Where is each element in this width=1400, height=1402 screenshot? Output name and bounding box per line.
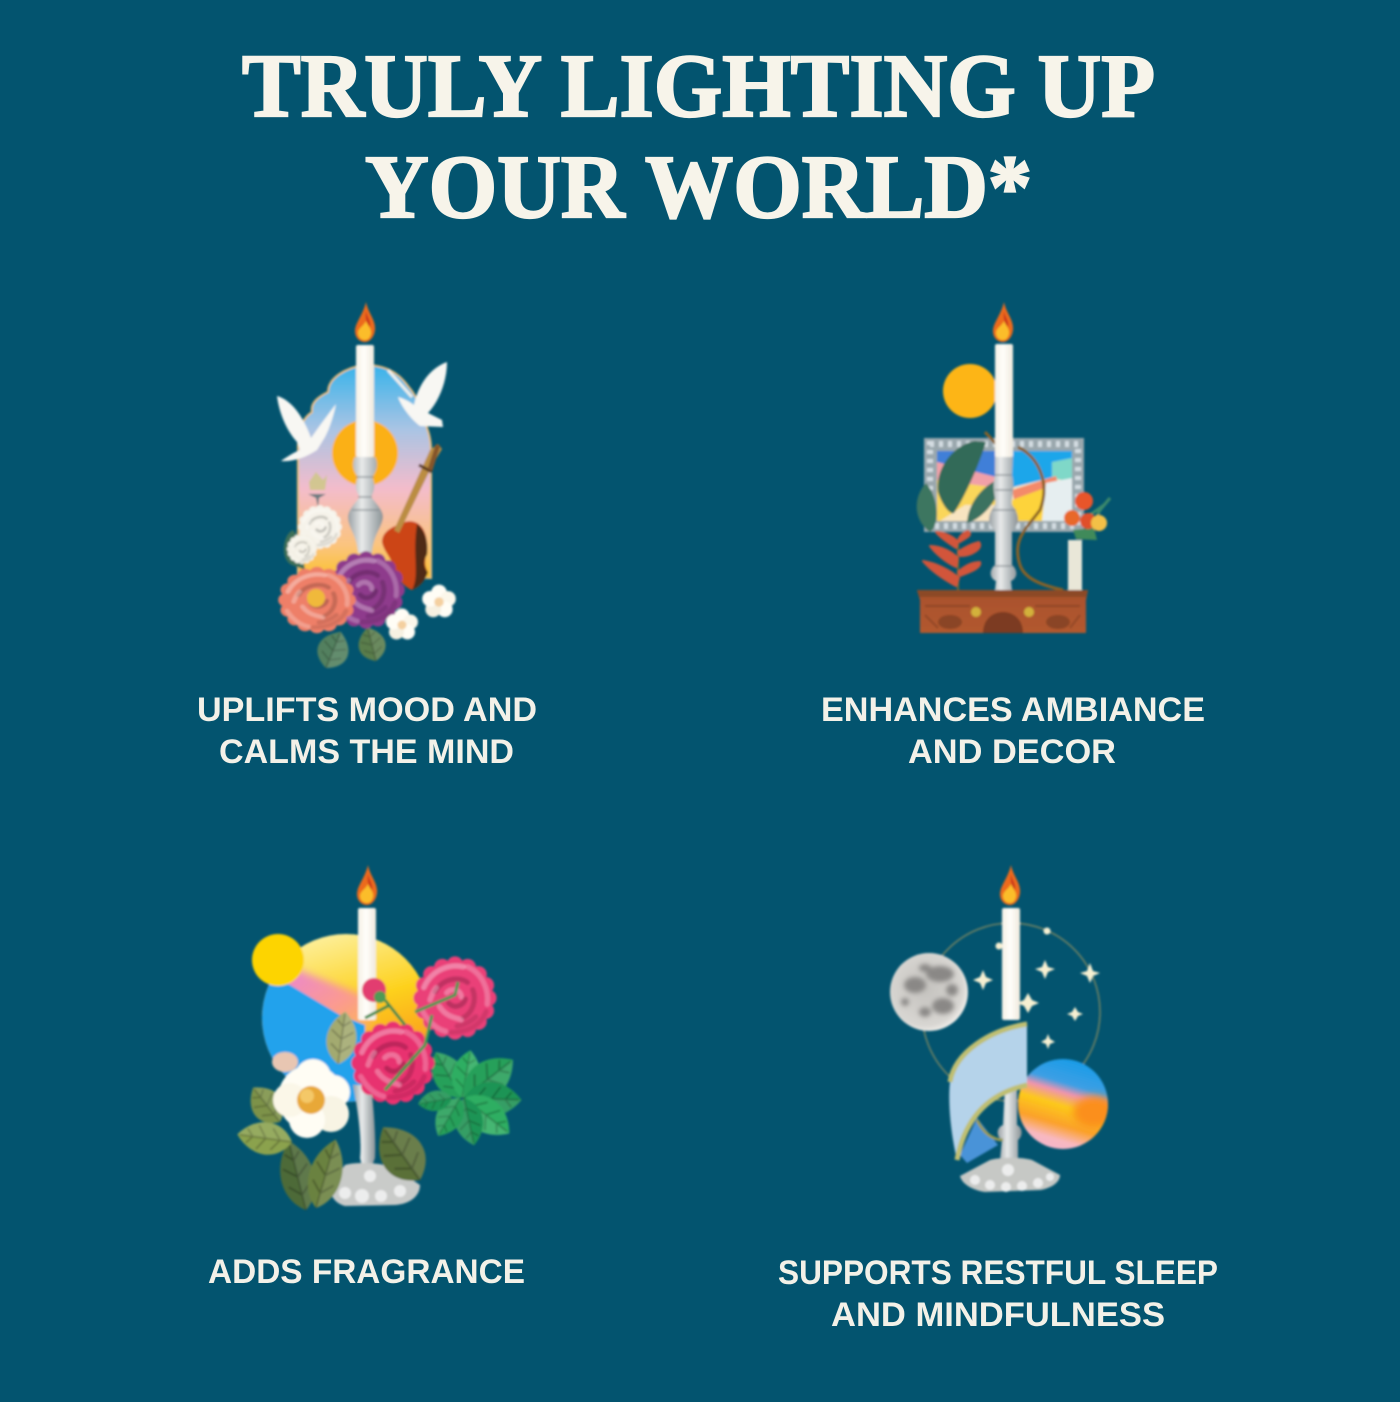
sun bbox=[943, 364, 997, 418]
caption: UPLIFTS MOOD AND bbox=[197, 691, 537, 729]
caption bbox=[778, 1254, 1218, 1334]
orbit ring bbox=[922, 923, 1100, 1101]
title bbox=[242, 37, 1155, 237]
leaves bbox=[235, 1010, 438, 1214]
white flowers bbox=[284, 505, 342, 570]
shelf bbox=[917, 590, 1088, 633]
candlestick stem and base bbox=[960, 1085, 1060, 1192]
illustration: candle with moon, stars, drape and planet bbox=[890, 865, 1117, 1192]
vase bbox=[1068, 540, 1082, 590]
caption bbox=[821, 691, 1205, 771]
caption: ENHANCES AMBIANCE bbox=[821, 691, 1205, 729]
panel: adds fragrance bbox=[208, 865, 525, 1291]
pink peonies bbox=[351, 956, 497, 1105]
pink bud bbox=[362, 978, 405, 1025]
picture frame bbox=[924, 438, 1084, 532]
leaves bbox=[312, 624, 389, 674]
candle bbox=[995, 344, 1013, 457]
candle bbox=[356, 345, 374, 457]
caption: ADDS FRAGRANCE bbox=[208, 1253, 525, 1291]
arch with gradient sky bbox=[298, 365, 431, 578]
coral peony bbox=[278, 567, 356, 633]
left dove bbox=[277, 396, 336, 461]
caption: CALMS THE MIND bbox=[219, 733, 514, 771]
yellow circle bbox=[252, 934, 304, 986]
caption: AND MINDFULNESS bbox=[831, 1296, 1165, 1334]
heliconia plant bbox=[923, 531, 980, 590]
stem and base bbox=[331, 1085, 420, 1206]
vine bbox=[985, 432, 1063, 590]
flame bbox=[357, 865, 377, 905]
panel: uplifts mood bbox=[197, 302, 537, 771]
orange bouquet bbox=[1064, 492, 1110, 540]
purple peony bbox=[327, 551, 405, 629]
broad leaves bbox=[917, 441, 997, 532]
caption: SUPPORTS RESTFUL SLEEP bbox=[778, 1254, 1218, 1292]
small white blossoms bbox=[386, 585, 456, 640]
blue drape bbox=[949, 1022, 1027, 1163]
illustration: candle with arch, doves, violin and flowers bbox=[277, 302, 456, 674]
panel: enhances ambiance bbox=[821, 302, 1205, 771]
flame bbox=[993, 302, 1013, 342]
candlestick holder bbox=[989, 455, 1018, 590]
gradient disc bbox=[260, 932, 429, 1104]
title: TRULY LIGHTING UP bbox=[242, 37, 1155, 136]
caption: AND DECOR bbox=[908, 733, 1116, 771]
illustration: candle with disc, peonies and camellia bbox=[235, 865, 524, 1214]
right dove bbox=[388, 362, 447, 427]
green palmate leaf bbox=[416, 1044, 524, 1148]
flame bbox=[355, 302, 375, 342]
infographic canvas bbox=[199, 55, 1217, 1326]
candlestick holder bbox=[348, 457, 383, 553]
title: YOUR WORLD* bbox=[365, 138, 1032, 237]
gradient planet bbox=[1018, 1059, 1117, 1149]
candle bbox=[358, 908, 376, 1020]
stars bbox=[973, 928, 1100, 1049]
illustration: candle with picture frame, sun and shelf bbox=[917, 302, 1110, 633]
flame bbox=[1000, 865, 1020, 905]
panel: supports restful sleep bbox=[778, 865, 1218, 1334]
moon bbox=[890, 953, 968, 1031]
small bud bbox=[272, 1052, 298, 1072]
sun bbox=[332, 420, 398, 486]
violin bbox=[382, 444, 442, 590]
white camellia bbox=[273, 1059, 350, 1138]
candle bbox=[1002, 908, 1020, 1020]
small ornament bbox=[308, 472, 327, 508]
caption bbox=[197, 691, 537, 771]
